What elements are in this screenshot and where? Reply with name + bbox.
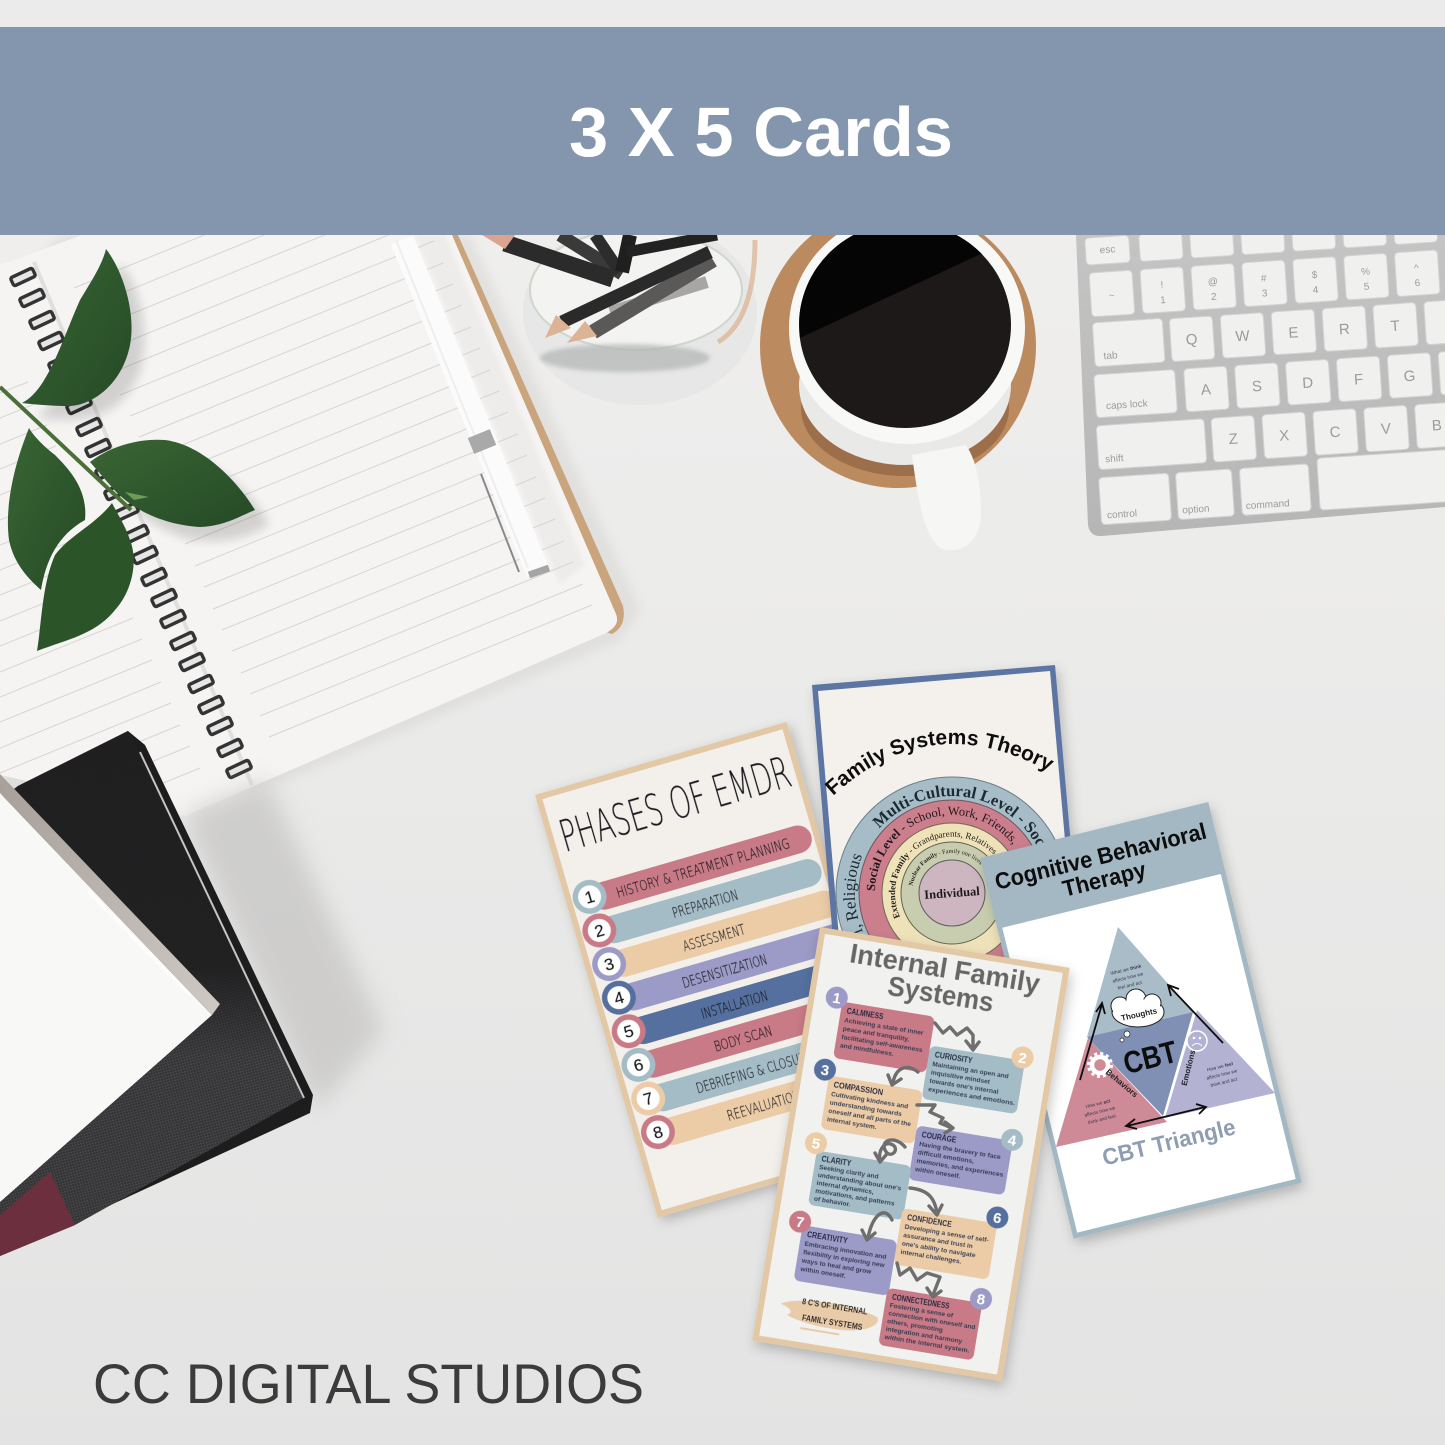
cork coaster	[760, 204, 1036, 488]
burgundy strap	[0, 1172, 75, 1256]
box 2: curiosity: inquisitive mindset	[930, 1069, 991, 1086]
caption: feel	[1204, 1060, 1240, 1090]
paper edge	[0, 774, 220, 1015]
box 4: courage: COURAGE	[921, 1129, 957, 1145]
box 7: creativity: ways to heal and grow	[800, 1257, 873, 1276]
banner	[0, 27, 1445, 235]
key labels: T	[1390, 318, 1400, 335]
key labels: tab	[1103, 350, 1118, 362]
caption: act: think and feel	[1087, 1113, 1117, 1126]
sad face icon	[1187, 1031, 1207, 1051]
number badges: 4	[612, 988, 626, 1009]
card heading: Cognitive Behavioral	[992, 818, 1209, 895]
box 5: clarity: motivations, and patterns	[815, 1188, 895, 1208]
phase labels: BODY SCAN	[712, 1023, 775, 1056]
caption: act: How we act	[1085, 1098, 1111, 1110]
leaf: top	[22, 249, 132, 406]
key labels: @	[1207, 276, 1218, 288]
key labels	[1089, 222, 1445, 521]
phase labels: PREPARATION	[671, 888, 740, 922]
caption: act	[1082, 1097, 1118, 1127]
handle	[912, 445, 981, 550]
box 3: compassion: understanding towards	[829, 1099, 903, 1118]
number badges: 7	[794, 1214, 805, 1232]
box 6: confidence	[893, 1208, 997, 1280]
spiral binding	[10, 268, 252, 778]
box 8: connectedness: others, promoting	[887, 1318, 943, 1334]
key labels: esc	[1099, 244, 1116, 256]
box 7: creativity: CREATIVITY	[806, 1229, 849, 1246]
caption: think: affects how we	[1112, 971, 1144, 985]
box 8: connectedness: Fostering a sense of	[889, 1302, 954, 1320]
top strip	[0, 0, 1445, 27]
key labels: 5	[1363, 281, 1370, 293]
lower row	[1096, 402, 1445, 470]
number badges	[569, 876, 679, 1153]
squiggly arrows between boxes	[862, 1023, 979, 1297]
box 1: calmness: and mindfulness.	[839, 1042, 894, 1058]
box 1: calmness: CALMNESS	[846, 1006, 884, 1021]
box 3: compassion: COMPASSION	[833, 1079, 884, 1097]
caption: feel: affects how we	[1206, 1068, 1238, 1082]
box 2: curiosity: CURIOSITY	[934, 1049, 973, 1065]
box 7: creativity	[794, 1225, 897, 1296]
box 5: clarity: Seeking clarity and	[819, 1164, 879, 1181]
key labels: W	[1235, 327, 1251, 345]
caption: feel: How we feel	[1206, 1061, 1234, 1073]
key labels: 6	[1414, 278, 1421, 289]
gear icon	[1088, 1054, 1112, 1076]
key labels: #	[1261, 273, 1267, 285]
pen	[396, 240, 549, 575]
key labels: control	[1107, 508, 1137, 521]
card: Cognitive Behavioral Therapy	[980, 802, 1302, 1239]
key labels: 3	[1262, 288, 1268, 300]
phase labels: DEBRIEFING & CLOSURE	[694, 1048, 814, 1097]
card frame	[812, 665, 1090, 1085]
caption: feel: think and act	[1210, 1076, 1239, 1089]
key labels: E	[1288, 324, 1299, 342]
box 5: clarity: of behavior.	[813, 1196, 851, 1209]
number badges	[780, 985, 1043, 1312]
number badges: 5	[622, 1021, 636, 1042]
card frame	[535, 722, 909, 1218]
box 1: calmness	[833, 1002, 935, 1073]
key labels: option	[1182, 504, 1210, 516]
box 3: compassion	[820, 1075, 923, 1144]
box 4: courage: difficult emotions,	[917, 1149, 975, 1165]
notebook pages	[0, 235, 617, 816]
black wallet	[0, 731, 313, 1256]
box 6: confidence: assurance and trust in	[903, 1232, 973, 1250]
number badges: 3	[819, 1062, 830, 1080]
key labels: D	[1302, 374, 1314, 392]
leaf shadows	[36, 263, 269, 541]
stem	[0, 387, 131, 510]
card heading: Internal Family	[848, 937, 1043, 999]
number badges: 8	[975, 1291, 986, 1309]
key labels: shift	[1105, 453, 1124, 465]
box 6: confidence: CONFIDENCE	[906, 1212, 953, 1229]
key labels: Z	[1228, 431, 1238, 448]
key labels: X	[1279, 427, 1290, 445]
key labels: 2	[1211, 292, 1217, 303]
CBT triangle: Emotions	[1180, 1049, 1197, 1087]
function row	[1085, 212, 1445, 265]
key labels: command	[1246, 498, 1290, 512]
key labels: G	[1403, 368, 1416, 385]
key labels: Q	[1185, 331, 1198, 349]
box 4: courage: within oneself.	[914, 1166, 961, 1180]
box 4: courage: Having the bravery to face	[919, 1141, 1001, 1161]
notebook	[0, 166, 640, 850]
number row	[1089, 246, 1445, 317]
key labels: %	[1361, 266, 1370, 278]
key labels: 1	[1160, 295, 1167, 306]
card: Phases of EMDR	[535, 722, 909, 1218]
card heading on arc: Family Systems Theory	[824, 732, 1054, 795]
concentric circle diagram: Individual	[924, 884, 981, 902]
number badges: 2	[1017, 1049, 1028, 1068]
key labels: R	[1338, 321, 1350, 339]
box 2: curiosity	[922, 1045, 1025, 1114]
brush stamp caption: 8 C'S OF INTERNAL	[802, 1296, 868, 1317]
box 5: clarity: internal dynamics,	[816, 1180, 874, 1196]
card frame	[752, 927, 1070, 1381]
key labels: ^	[1414, 263, 1419, 274]
phase labels: DESENSITIZATION	[680, 952, 769, 992]
box 5: clarity: CLARITY	[821, 1153, 852, 1168]
card: Internal Family Systems: Systems	[885, 970, 996, 1018]
number badges: 7	[641, 1089, 655, 1109]
phase labels: INSTALLATION	[699, 988, 770, 1023]
number badges: 4	[1006, 1132, 1018, 1150]
concentric circle diagram: Nuclear Family - Family one lives with	[908, 848, 982, 886]
thought cloud: Thoughts	[1120, 1006, 1158, 1023]
box 8: connectedness: CONNECTEDNESS	[891, 1292, 950, 1311]
side labels: Behaviors	[1104, 1068, 1140, 1100]
box 8: connectedness: integration and harmony	[885, 1326, 963, 1345]
concentric circle diagram: l, Religious	[843, 854, 864, 933]
box 7: creativity: flexibility in exploring new	[803, 1249, 886, 1269]
keyboard	[1076, 211, 1445, 536]
number badges: 2	[592, 920, 607, 941]
box 5: clarity: understanding about one's	[817, 1172, 902, 1193]
center label: CBT	[1120, 1034, 1181, 1081]
box 7: creativity: within oneself.	[799, 1266, 846, 1280]
plant sprig	[0, 249, 269, 651]
key labels: B	[1431, 417, 1442, 435]
box 3: compassion: internal system.	[826, 1116, 877, 1131]
coffee cup	[789, 212, 1025, 550]
pen shadow on page	[415, 235, 585, 585]
box 4: courage	[908, 1125, 1013, 1195]
box 1: calmness: peace and tranquility,	[842, 1026, 910, 1043]
number badges: 1	[831, 990, 842, 1008]
notebook board edge	[452, 235, 624, 634]
qwerty row	[1092, 298, 1445, 367]
box 1: calmness: facilitating self-awareness	[841, 1034, 923, 1054]
key labels: V	[1380, 420, 1392, 438]
number badges: 5	[810, 1135, 821, 1153]
concentric circle diagram: Social Level - School, Work, Friends,	[866, 806, 1015, 890]
concentric circle diagram: Extended Family - Grandparents, Relatives,	[888, 832, 996, 920]
box 8: connectedness: within the internal system.	[883, 1334, 970, 1355]
key labels: caps lock	[1106, 398, 1149, 412]
concentric circle diagram	[836, 776, 1056, 958]
CBT triangle	[1056, 927, 1275, 1171]
box 1: calmness: Achieving a state of inner	[844, 1017, 924, 1037]
box 2: curiosity: Maintaining an open and	[932, 1061, 1009, 1080]
number badges: 6	[992, 1209, 1003, 1228]
title: 3 X 5 Cards	[569, 93, 953, 171]
box 6: confidence: Developing a sense of self-	[904, 1224, 989, 1244]
number badges: 1	[583, 887, 597, 908]
box 3: compassion: oneself and all parts of the	[828, 1108, 912, 1128]
phase labels	[615, 836, 860, 1137]
concentric circle diagram: Multi-Cultural Level - Societal	[872, 785, 1044, 844]
key labels: C	[1329, 424, 1341, 441]
pencils	[482, 235, 717, 343]
key labels: $	[1312, 270, 1318, 281]
arrows	[1080, 985, 1223, 1129]
home row	[1094, 349, 1445, 418]
box 8: connectedness	[878, 1288, 982, 1360]
box 8: connectedness: connection with oneself and	[888, 1310, 976, 1331]
shadow of wallet	[183, 780, 383, 1110]
card heading: PHASES OF EMDR	[554, 747, 797, 862]
box 3: compassion: Cultivating kindness and	[831, 1091, 909, 1111]
box 2: curiosity: experiences and emotions.	[928, 1086, 1016, 1107]
key labels: !	[1160, 280, 1164, 291]
phase bars	[587, 820, 891, 1148]
triangle caption: CBT Triangle	[1100, 1114, 1238, 1171]
caption: think	[1110, 963, 1146, 993]
caption: act: affects how we	[1084, 1105, 1116, 1119]
brush stamp caption: FAMILY SYSTEMS	[801, 1312, 863, 1332]
number badges: 6	[631, 1055, 646, 1076]
card: Internal Family Systems	[752, 927, 1070, 1381]
key labels: S	[1251, 378, 1262, 395]
number badges: 8	[651, 1122, 665, 1143]
key labels: ~	[1108, 290, 1115, 302]
thought cloud	[1111, 989, 1164, 1042]
white paper	[0, 793, 212, 1202]
number badges: 3	[602, 954, 616, 975]
brand text: CC DIGITAL STUDIOS	[93, 1353, 644, 1415]
leaf: bottom	[37, 503, 134, 651]
box 6: confidence: one's ability to navigate	[901, 1240, 976, 1259]
box 6: confidence: internal challenges.	[900, 1249, 962, 1266]
box 7: creativity: Embracing innovation and	[804, 1241, 887, 1261]
caption: think: What we think	[1110, 963, 1142, 977]
box 5: clarity	[808, 1150, 912, 1220]
phase labels: ASSESSMENT	[681, 922, 747, 955]
box 4: courage: memories, and experiences	[916, 1158, 1004, 1179]
key labels: F	[1354, 371, 1364, 389]
caption: think: feel and act	[1117, 980, 1143, 992]
leaf: right	[90, 440, 255, 527]
card frame	[980, 802, 1302, 1239]
card: Family Systems Theory	[810, 665, 1078, 958]
card: Cognitive Behavioral Therapy: Therapy	[1060, 856, 1149, 902]
key labels: A	[1200, 381, 1212, 399]
ruled lines	[0, 166, 592, 850]
key labels: 4	[1313, 285, 1319, 296]
bottom row	[1098, 445, 1445, 525]
box 2: curiosity: towards one's internal	[929, 1078, 999, 1096]
coffee	[799, 235, 1011, 428]
leaf: left	[8, 428, 85, 590]
phase labels: REEVALUATION	[725, 1088, 803, 1125]
glass jar with pencils	[482, 219, 757, 405]
phase labels: HISTORY & TREATMENT PLANNING	[615, 836, 792, 902]
brush stamp caption	[777, 1293, 880, 1340]
